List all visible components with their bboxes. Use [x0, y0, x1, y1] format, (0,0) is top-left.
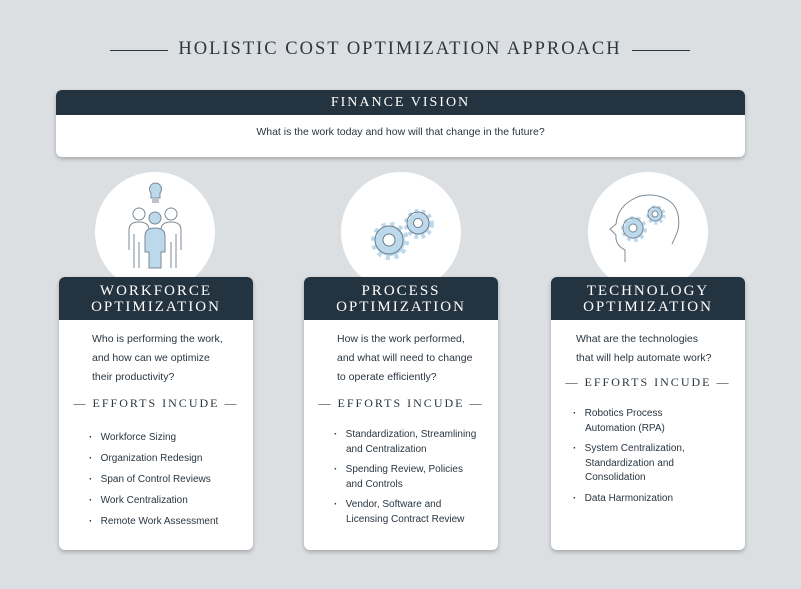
heading: process: PROCESS — [361, 283, 441, 299]
text: workforce question: their productivity? — [92, 371, 174, 383]
list: workforce efforts: · Organization Redesign — [89, 453, 202, 464]
list: technology efforts: · Data Harmonization — [573, 492, 673, 504]
heading: workforce: OPTIMIZATION — [91, 299, 221, 315]
heading: process: OPTIMIZATION — [336, 299, 466, 315]
text: process question — [337, 333, 472, 383]
heading: workforce — [59, 277, 253, 320]
icon: process gears — [341, 172, 461, 292]
text: process question: How is the work performed, — [337, 333, 465, 345]
heading: efforts: — EFFORTS INCUDE — — [566, 375, 730, 389]
list: process efforts: · Spending Review, Policies — [334, 464, 463, 475]
text: technology question: that will help automate work? — [576, 352, 711, 364]
list: workforce efforts: · Remote Work Assessment — [89, 516, 218, 527]
list: workforce efforts: · Work Centralization — [89, 495, 188, 506]
heading: technology: OPTIMIZATION — [583, 299, 713, 315]
heading: efforts: — EFFORTS INCUDE — — [319, 396, 483, 410]
list: process efforts: · Standardization, Streamlining — [334, 429, 476, 440]
title: HOLISTIC COST OPTIMIZATION APPROACH — [178, 39, 622, 59]
heading: finance vision — [56, 90, 745, 115]
panel: process optimization — [304, 277, 498, 550]
list: workforce efforts: · Workforce Sizing — [89, 432, 176, 443]
list: technology efforts — [573, 408, 685, 504]
panel: finance vision — [56, 90, 745, 157]
heading: process — [304, 277, 498, 320]
text: process question: to operate efficiently? — [337, 371, 437, 383]
panel: technology optimization — [551, 277, 745, 550]
list: technology efforts: · Robotics Process — [573, 408, 662, 419]
heading: workforce: WORKFORCE — [100, 283, 212, 299]
heading: efforts: — EFFORTS INCUDE — — [74, 396, 238, 410]
text: finance question: What is the work today and how will that change in the future? — [256, 126, 545, 138]
panel: workforce optimization — [59, 277, 253, 550]
list: process efforts — [334, 429, 476, 525]
list: technology efforts: Consolidation — [585, 472, 646, 483]
icon: workforce people — [95, 172, 215, 292]
icon: technology head — [588, 172, 708, 292]
text: process question: and what will need to change — [337, 352, 472, 364]
heading: finance vision: FINANCE VISION — [331, 95, 470, 110]
list: workforce efforts: · Span of Control Reviews — [89, 474, 211, 485]
list: process efforts: · Vendor, Software and — [334, 499, 441, 510]
text: technology question — [576, 333, 712, 364]
heading: technology — [551, 277, 745, 320]
list: workforce efforts — [89, 432, 218, 527]
list: technology efforts: Automation (RPA) — [585, 422, 665, 434]
list: process efforts: and Controls — [346, 479, 403, 490]
text: workforce question: Who is performing the work, — [92, 333, 223, 345]
text: workforce question: and how can we optimize — [92, 352, 210, 364]
heading: technology: TECHNOLOGY — [587, 283, 709, 299]
list: process efforts: Licensing Contract Review — [346, 514, 464, 525]
list: technology efforts: · System Centralization, — [573, 443, 685, 454]
list: technology efforts: Standardization and — [585, 458, 674, 468]
text: technology question: What are the technologies — [576, 333, 698, 345]
text: workforce question — [92, 333, 223, 383]
list: process efforts: and Centralization — [346, 444, 427, 455]
